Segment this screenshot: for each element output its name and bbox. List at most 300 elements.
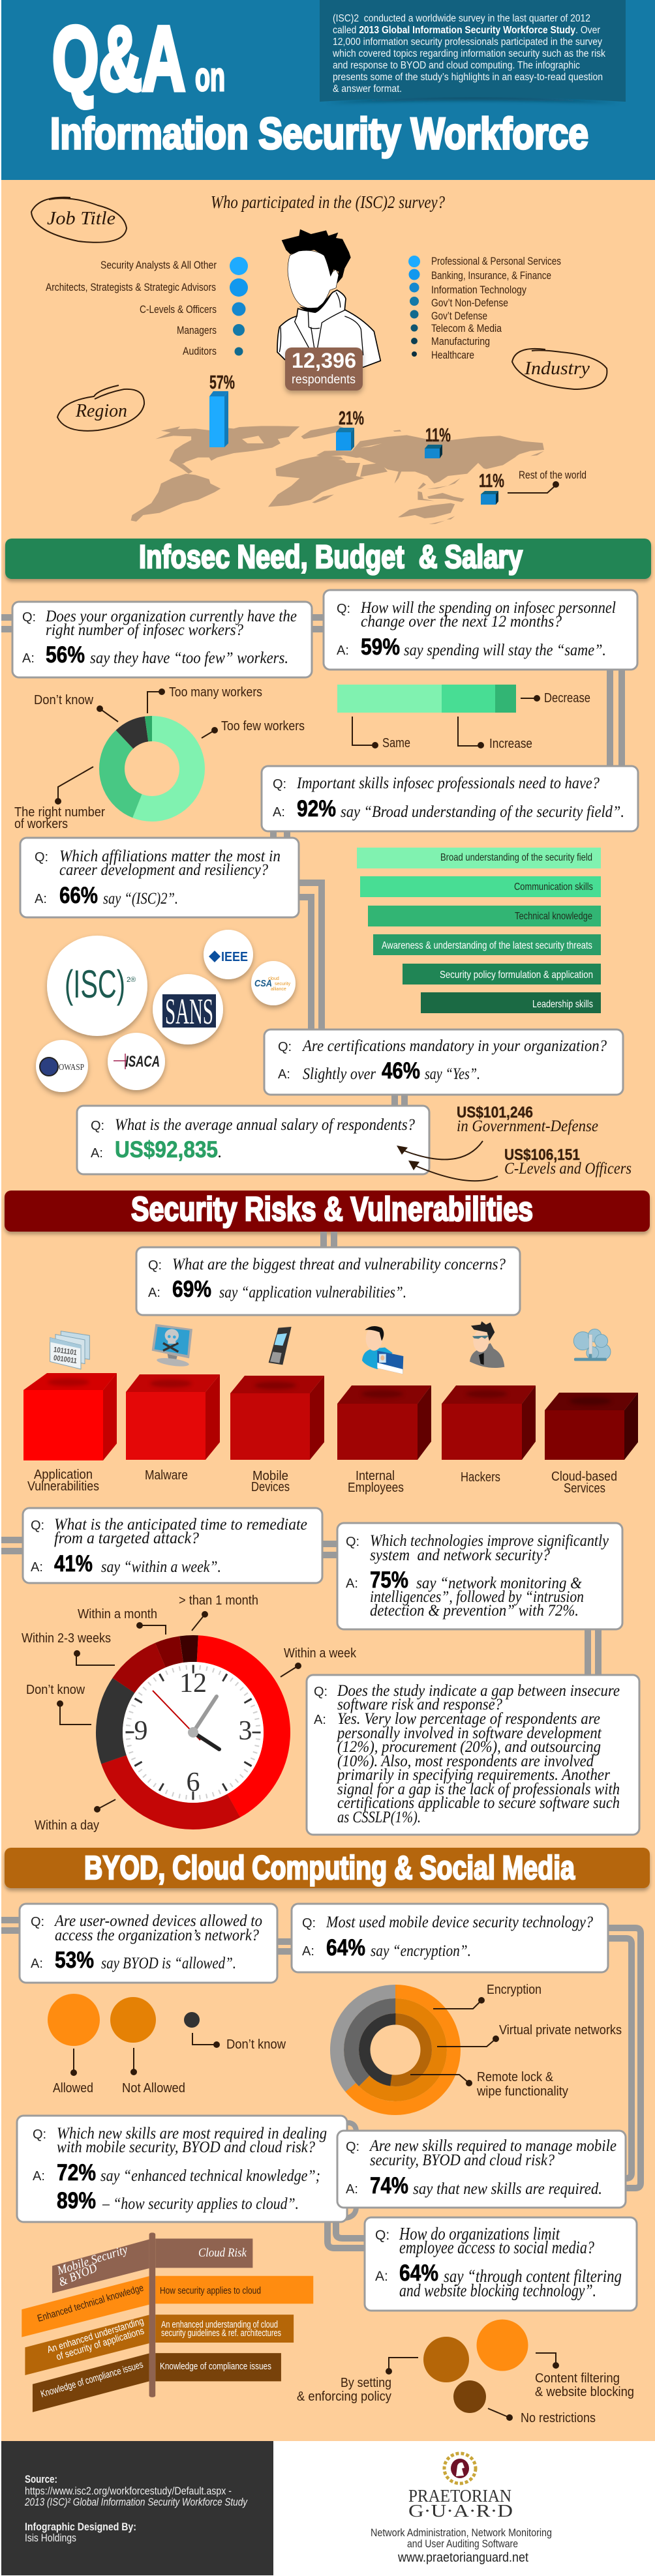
intro text panel: 12,000 information security professionals participated in the survey bbox=[333, 37, 602, 48]
clock face bbox=[123, 1662, 264, 1803]
section banner: infosec need bbox=[5, 539, 651, 579]
signpost bbox=[22, 2232, 313, 2412]
3d risk bars bbox=[23, 1373, 638, 1460]
bar: Asia 11%: 11% bbox=[425, 425, 451, 446]
ring segments bbox=[77, 1616, 309, 1848]
label: same: Same bbox=[382, 736, 410, 750]
q&a: are new skills required: 74% bbox=[370, 2173, 408, 2198]
donut chart: workers bbox=[14, 685, 305, 831]
callout: c-levels: US$106,151 bbox=[504, 1146, 580, 1164]
logo: OWASP: OWASP bbox=[59, 1063, 84, 1073]
footer: praetorian guard logo: and User Auditing Software bbox=[407, 2538, 518, 2550]
q&a: right number of workers: right number of infosec workers? bbox=[46, 620, 243, 639]
sign text: right: An enhanced understanding of cloud bbox=[161, 2319, 278, 2330]
intro text panel: & answer format. bbox=[333, 83, 402, 95]
header banner bbox=[1, 0, 655, 180]
q&a: user-owned devices: say BYOD is “allowed”. bbox=[101, 1953, 236, 1972]
skill bars bbox=[357, 848, 601, 1013]
callout: government defense bbox=[397, 1104, 598, 1159]
q&a: are new skills required: A: bbox=[346, 2182, 358, 2197]
label: within a week bbox=[281, 1646, 357, 1677]
sign text: left: An enhanced understanding bbox=[46, 2316, 145, 2356]
industry list: Gov’t Non-Defense bbox=[431, 297, 508, 309]
q&a: certifications: Are certifications mandatory in your organization? bbox=[301, 1036, 607, 1055]
q&a: important skills: A: bbox=[273, 805, 285, 820]
respondents badge: respondents bbox=[292, 373, 356, 387]
logo: SANS: SANS bbox=[165, 992, 213, 1032]
bubble chart: byod allowed bbox=[48, 1994, 286, 2095]
q&a: salary: What is the average annual salary of respondents? bbox=[115, 1115, 415, 1134]
sign text: left bbox=[36, 2243, 145, 2400]
q&a: software risk gap: A: bbox=[314, 1713, 326, 1727]
sign text: left: Enhanced technical knowledge bbox=[36, 2283, 145, 2324]
risk labels: Mobile bbox=[252, 1469, 288, 1483]
q&a: are new skills required: Are new skills required to manage mobile bbox=[369, 2136, 617, 2155]
clock face: 6 bbox=[187, 1768, 200, 1798]
q&a: right number of workers: 56% bbox=[46, 642, 85, 668]
connectors: risks 2 bbox=[1, 1540, 598, 1675]
bar: malware bbox=[126, 1374, 220, 1460]
q&a: software risk gap: primarily in specifying requirements. Another bbox=[336, 1765, 610, 1784]
q&a: technologies: detection & prevention” with 72%. bbox=[370, 1601, 579, 1620]
callout: c-levels bbox=[408, 1146, 632, 1181]
bar: hackers bbox=[442, 1385, 536, 1460]
label: don't know bbox=[192, 2033, 286, 2052]
skill bars: Leadership skills bbox=[532, 999, 593, 1010]
risk labels: Services bbox=[564, 1481, 605, 1496]
q&a: social media: Q: bbox=[375, 2228, 389, 2243]
label: increase bbox=[458, 717, 532, 751]
q&a: right number of workers: Q: bbox=[22, 610, 36, 625]
intro text panel bbox=[320, 0, 626, 103]
q&a: spending change: How will the spending on infosec personnel bbox=[360, 598, 616, 617]
respondents badge: 12,396 bbox=[292, 349, 356, 372]
industry tag bbox=[512, 349, 607, 389]
region tag bbox=[57, 385, 144, 431]
label: decrease: Decrease bbox=[544, 691, 590, 705]
q&a: important skills bbox=[262, 766, 638, 831]
label: decrease bbox=[521, 691, 590, 705]
connector: risks bbox=[324, 1232, 334, 1247]
label: by setting bbox=[297, 2358, 418, 2404]
bar: mobile devices bbox=[230, 1376, 324, 1460]
logo: SANS bbox=[153, 974, 223, 1044]
q&a: certifications: 46% bbox=[382, 1058, 420, 1084]
label: than 1 month: > than 1 month bbox=[179, 1593, 258, 1608]
q&a: time to remediate: 41% bbox=[54, 1551, 93, 1577]
logo: CSA bbox=[251, 961, 296, 1005]
q&a: software risk gap: as CSSLP(1%). bbox=[337, 1807, 421, 1826]
label: encryption: Encryption bbox=[487, 1983, 541, 1997]
q&a: important skills: say “Broad understanding of the security field”. bbox=[341, 802, 624, 821]
respondent figure bbox=[277, 229, 380, 367]
q&a: new skills needed: A: bbox=[33, 2169, 45, 2184]
bar: internal employees bbox=[337, 1385, 431, 1460]
footer: source panel bbox=[1, 2441, 273, 2575]
label: don't know bbox=[26, 1683, 91, 1725]
q&a: threat concerns: 69% bbox=[172, 1277, 211, 1302]
label: allowed bbox=[53, 2049, 93, 2095]
sign text: right bbox=[160, 2246, 281, 2372]
q&a: important skills: Important skills infosec professionals need to have? bbox=[296, 773, 600, 792]
q&a: spending change: A: bbox=[337, 644, 349, 658]
industry list bbox=[408, 255, 561, 361]
sign text: right: Cloud Risk bbox=[198, 2246, 247, 2260]
q&a: new skills needed: – “how security applies to cloud”. bbox=[102, 2194, 299, 2213]
q&a: new skills needed: 89% bbox=[57, 2188, 96, 2213]
footer: praetorian guard logo: Network Administration, Network Monitoring bbox=[371, 2526, 552, 2539]
risk labels: Malware bbox=[145, 1468, 188, 1483]
q&a: software risk gap: certifications applicable to secure software such bbox=[337, 1793, 620, 1812]
q&a: right number of workers: say they have “too few” workers. bbox=[90, 648, 288, 667]
bar: application vulnerabilities bbox=[23, 1373, 117, 1460]
q&a: spending change bbox=[324, 590, 637, 670]
q&a: technologies: A: bbox=[346, 1577, 358, 1591]
q&a: social media: 64% bbox=[399, 2260, 438, 2286]
bar: Europe 21%: 21% bbox=[339, 408, 364, 429]
label: increase: Increase bbox=[489, 737, 532, 751]
logo: ISC2 bbox=[47, 936, 147, 1036]
q&a: technologies: intelligences”, followed by “intrusion bbox=[370, 1587, 584, 1606]
q&a: social media: and website blocking technology”. bbox=[399, 2281, 596, 2300]
label: remote lock: Remote lock & bbox=[477, 2070, 554, 2084]
q&a: affiliations bbox=[20, 838, 299, 917]
job title list: C-Levels & Officers bbox=[140, 303, 217, 316]
icon: application windows: 1011101 bbox=[53, 1346, 78, 1357]
label: content filtering bbox=[535, 2353, 634, 2399]
risk labels: Vulnerabilities bbox=[27, 1479, 99, 1494]
q&a: social media: A: bbox=[375, 2269, 388, 2284]
salary callouts bbox=[397, 1104, 632, 1181]
risk labels: Devices bbox=[251, 1480, 290, 1494]
q&a: salary: . bbox=[218, 1142, 222, 1161]
threat icons bbox=[50, 1322, 611, 1374]
footer: praetorian guard logo: G·U·A·R·D bbox=[408, 2501, 513, 2521]
industry list: Banking, Insurance, & Finance bbox=[431, 269, 551, 282]
q&a: important skills: Q: bbox=[273, 777, 286, 792]
q&a: mobile security technology bbox=[292, 1904, 608, 1972]
q&a: social media: How do organizations limit bbox=[399, 2224, 560, 2243]
world map bbox=[131, 426, 544, 524]
icon: malware monitor bbox=[152, 1324, 192, 1368]
logo: OWASP bbox=[36, 1040, 88, 1092]
clock face: 3 bbox=[239, 1716, 252, 1746]
q&a: time to remediate: Q: bbox=[31, 1518, 44, 1533]
q&a: spending change: Q: bbox=[337, 602, 350, 616]
job title list: Security Analysts & All Other bbox=[100, 259, 217, 271]
q&a: salary: A: bbox=[91, 1146, 103, 1161]
q&a: software risk gap: signal for a gap is the lack of professionals with bbox=[337, 1779, 620, 1798]
title: on bbox=[195, 55, 225, 100]
q&a: certifications: Q: bbox=[278, 1040, 292, 1054]
job title list: Managers bbox=[177, 324, 217, 336]
q&a: affiliations: A: bbox=[35, 892, 47, 906]
skill bars: Security policy formulation & application bbox=[440, 970, 593, 981]
job title tag bbox=[31, 198, 127, 243]
q&a: new skills needed: Q: bbox=[33, 2127, 46, 2142]
sign text: right: security guidelines & ref. architectures bbox=[161, 2328, 281, 2339]
clock face: 9 bbox=[134, 1716, 147, 1746]
footer: praetorian guard logo: PRAETORIAN bbox=[408, 2486, 511, 2506]
q&a: software risk gap: Does the study indicate a gap between insecure bbox=[337, 1681, 620, 1700]
industry list: Manufacturing bbox=[431, 335, 490, 348]
q&a: software risk gap: (10%). Also, most respondents are involved bbox=[337, 1751, 594, 1770]
section banner: infosec need: Infosec Need, Budget & Salary bbox=[139, 539, 523, 575]
logo: CSA: alliance bbox=[271, 987, 286, 992]
q&a: new skills needed: Which new skills are most required in dealing bbox=[57, 2124, 327, 2142]
q&a: mobile security technology: Most used mobile device security technology? bbox=[326, 1912, 593, 1931]
q&a: are new skills required bbox=[337, 2131, 626, 2208]
footer: praetorian guard logo: www.praetorianguard.net bbox=[397, 2551, 528, 2565]
q&a: social media bbox=[365, 2217, 637, 2311]
footer: source panel: Isis Holdings bbox=[25, 2532, 76, 2544]
label: don't know: Don’t know bbox=[226, 2037, 286, 2052]
label: don't know: Don’t know bbox=[26, 1683, 85, 1697]
q&a: right number of workers bbox=[12, 602, 312, 677]
footer: praetorian guard logo bbox=[371, 2453, 552, 2565]
q&a: software risk gap bbox=[307, 1675, 639, 1835]
q&a: salary: Q: bbox=[91, 1119, 104, 1133]
label: right number bbox=[14, 767, 105, 831]
q&a: mobile security technology: A: bbox=[302, 1944, 314, 1959]
icon: internal employee bbox=[362, 1326, 403, 1374]
q&a: threat concerns: Q: bbox=[148, 1258, 162, 1273]
logo: ISACA: ISACA bbox=[125, 1053, 160, 1071]
label: rest of the world: Rest of the world bbox=[519, 469, 586, 481]
q&a: threat concerns bbox=[136, 1247, 520, 1315]
label: no restrictions: No restrictions bbox=[521, 2411, 596, 2425]
q&a: affiliations: Which affiliations matter the most in bbox=[59, 846, 281, 865]
label: allowed: Allowed bbox=[53, 2081, 93, 2095]
bar: rest of the world 11% bbox=[479, 471, 504, 505]
sign text: right: Knowledge of compliance issues bbox=[160, 2361, 271, 2372]
q&a: technologies: system and network security? bbox=[370, 1545, 550, 1564]
q&a: new skills needed: with mobile security, BYOD and cloud risk? bbox=[57, 2137, 315, 2156]
label: rest of the world bbox=[508, 469, 586, 493]
label: virtual private networks: Virtual private networks bbox=[499, 2023, 622, 2037]
label: not allowed: Not Allowed bbox=[122, 2081, 185, 2095]
q&a: right number of workers: Does your organization currently have the bbox=[45, 606, 297, 625]
risk labels: Internal bbox=[356, 1469, 395, 1483]
label: within a month: Within a month bbox=[78, 1607, 157, 1621]
q&a: threat concerns: say “application vulnerabilities”. bbox=[219, 1282, 406, 1301]
industry list: Information Technology bbox=[431, 284, 526, 296]
bar: North America 57% bbox=[209, 372, 235, 447]
job title tag: Job Title bbox=[47, 208, 115, 229]
q&a: user-owned devices bbox=[20, 1904, 277, 1983]
q&a: technologies bbox=[337, 1523, 622, 1629]
q&a: affiliations: say “(ISC)2”. bbox=[103, 889, 178, 908]
label: right number: of workers bbox=[14, 817, 68, 831]
q&a: important skills: 92% bbox=[297, 796, 336, 822]
q&a: new skills needed bbox=[17, 2116, 347, 2222]
logo: ISC2: (ISC) bbox=[65, 962, 125, 1006]
job title list: Architects, Strategists & Strategic Advisors bbox=[46, 281, 216, 293]
label: right number: The right number bbox=[14, 805, 105, 820]
industry list: Telecom & Media bbox=[431, 322, 502, 334]
q&a: technologies: Which technologies improve significantly bbox=[370, 1531, 609, 1550]
label: encryption bbox=[433, 1983, 541, 2009]
q&a: user-owned devices: Q: bbox=[31, 1915, 44, 1929]
q&a: spending change: say spending will stay the “same”. bbox=[404, 640, 606, 659]
icon: application windows bbox=[50, 1331, 89, 1369]
q&a: user-owned devices: Are user-owned devices allowed to bbox=[53, 1911, 262, 1930]
label: within a day: Within a day bbox=[35, 1818, 99, 1833]
q&a: user-owned devices: access the organization’s network? bbox=[55, 1925, 259, 1944]
sign text: left: Knowledge of compliance issues bbox=[39, 2359, 144, 2400]
logo: ISC2: 2® bbox=[127, 976, 136, 984]
label: by setting: By setting bbox=[341, 2376, 391, 2390]
q&a: mobile security technology: Q: bbox=[302, 1916, 316, 1931]
q&a: software risk gap: Yes. Very low percentage of respondents are bbox=[337, 1709, 600, 1728]
footer: source panel: Source: bbox=[25, 2473, 57, 2485]
risk labels: Hackers bbox=[461, 1470, 500, 1485]
q&a: threat concerns: A: bbox=[148, 1286, 160, 1300]
intro text panel: presents some of the study’s highlights in an easy-to-read question bbox=[333, 72, 603, 83]
sign text: left: of security of applications bbox=[55, 2326, 145, 2363]
label: no restrictions bbox=[488, 2408, 596, 2425]
q&a: threat concerns: What are the biggest threat and vulnerability concerns? bbox=[172, 1254, 506, 1273]
logo: CSA: security bbox=[275, 982, 291, 986]
label: virtual private networks bbox=[437, 2023, 622, 2047]
callout: c-levels: C-Levels and Officers bbox=[504, 1159, 632, 1177]
skill bars: Technical knowledge bbox=[515, 911, 592, 922]
connectors: section 2 bbox=[1, 617, 622, 1106]
q&a: software risk gap: software risk and response? bbox=[337, 1695, 502, 1713]
industry list: Professional & Personal Services bbox=[431, 255, 561, 267]
logo: CSA: CSA bbox=[254, 978, 272, 989]
label: don't know: Don’t know bbox=[34, 693, 94, 707]
icon: hacker bbox=[470, 1322, 504, 1368]
intro text panel: which covered topics regarding information security such as the risk bbox=[332, 48, 605, 59]
risk labels: Application bbox=[34, 1468, 93, 1482]
job title list: Auditors bbox=[183, 345, 217, 357]
intro text panel: called 2013 Global Information Security Workforce Study. Over bbox=[333, 25, 600, 36]
q&a: spending change: 59% bbox=[361, 634, 400, 660]
sign boards bbox=[22, 2232, 313, 2412]
bar: Asia 11% bbox=[425, 425, 451, 458]
callout: government defense: US$101,246 bbox=[457, 1104, 533, 1121]
q&a: certifications: say “Yes”. bbox=[425, 1064, 480, 1083]
region bars bbox=[209, 372, 586, 505]
q&a: are new skills required: say that new skills are required. bbox=[413, 2179, 602, 2198]
bar: cloud-based services bbox=[545, 1393, 638, 1460]
q&a: certifications bbox=[264, 1029, 623, 1095]
q&a: affiliations: 66% bbox=[59, 883, 98, 908]
region tag: Region bbox=[75, 400, 127, 421]
icon: application windows: 0010011 bbox=[53, 1354, 78, 1365]
q&a: software risk gap: (12%), procurement (20%), and outsourcing bbox=[337, 1737, 601, 1756]
ring chart: mobile security bbox=[313, 1968, 622, 2132]
label: by setting: & enforcing policy bbox=[297, 2390, 391, 2404]
intro text panel: and response to BYOD and cloud computing. The infographic bbox=[333, 60, 580, 71]
label: within a month bbox=[78, 1607, 166, 1635]
risk labels bbox=[27, 1468, 617, 1496]
footer: source panel: 2013 (ISC)² Global Information Security Workforce Study bbox=[24, 2496, 248, 2508]
label: too few workers: Too few workers bbox=[221, 719, 305, 733]
icon: laurel crest bbox=[444, 2453, 476, 2483]
q&a: new skills needed: 72% bbox=[57, 2160, 96, 2185]
q&a: are new skills required: security, BYOD and cloud risk? bbox=[370, 2150, 555, 2169]
q&a: mobile security technology: 64% bbox=[326, 1935, 365, 1961]
industry list: Healthcare bbox=[431, 349, 474, 361]
q&a: mobile security technology: say “encryption”. bbox=[371, 1941, 471, 1960]
q&a: certifications: A: bbox=[278, 1067, 290, 1082]
label: too many workers bbox=[147, 685, 262, 713]
clock face: 12 bbox=[179, 1668, 207, 1698]
q&a: time to remediate: What is the anticipated time to remediate bbox=[54, 1515, 307, 1533]
label: too many workers: Too many workers bbox=[169, 685, 262, 700]
label: within 2-3 weeks bbox=[22, 1631, 115, 1665]
skill bars: Broad understanding of the security field bbox=[440, 852, 592, 863]
label: not allowed bbox=[122, 2048, 185, 2095]
q&a: user-owned devices: A: bbox=[31, 1957, 43, 1971]
connectors: byod bbox=[1, 1920, 641, 2248]
callout: government defense: in Government-Defense bbox=[457, 1116, 598, 1135]
q&a: are new skills required: Q: bbox=[346, 2140, 359, 2154]
label: content filtering: Content filtering bbox=[535, 2371, 620, 2386]
q&a: spending change: change over the next 12 months? bbox=[361, 612, 562, 630]
industry tag: Industry bbox=[524, 358, 590, 379]
q&a: software risk gap: personally involved in software development bbox=[336, 1723, 602, 1742]
q&a: time to remediate: A: bbox=[31, 1560, 43, 1575]
q&a: time to remediate bbox=[23, 1508, 322, 1583]
footer: source panel: https://www.isc2.org/workforcestudy/Default.aspx - bbox=[25, 2485, 232, 2497]
footer: source panel: Infographic Designed By: bbox=[25, 2521, 136, 2533]
q&a: technologies: Q: bbox=[346, 1535, 359, 1549]
sign text: left: Mobile Security bbox=[55, 2243, 130, 2278]
industry list: Gov’t Defense bbox=[431, 310, 487, 322]
survey question heading: Who participated in the (ISC)2 survey? bbox=[211, 192, 445, 212]
q&a: technologies: 75% bbox=[370, 1567, 408, 1593]
clock chart bbox=[22, 1593, 357, 1848]
bar: Europe 21% bbox=[336, 408, 364, 451]
respondents badge bbox=[285, 348, 363, 391]
risk labels: Employees bbox=[348, 1481, 404, 1495]
skill bars: Awareness & understanding of the latest security threats bbox=[382, 940, 592, 951]
q&a: time to remediate: say “within a week”. bbox=[101, 1557, 221, 1576]
title: Q&A bbox=[52, 7, 185, 110]
q&a: social media: say “through content filtering bbox=[444, 2266, 622, 2286]
logo: IEEE: IEEE bbox=[221, 950, 248, 964]
bar: North America 57%: 57% bbox=[209, 372, 235, 393]
label: don't know bbox=[34, 693, 118, 722]
label: within a week: Within a week bbox=[284, 1646, 357, 1661]
skill bars: Communication skills bbox=[514, 881, 593, 893]
sign text: right: How security applies to cloud bbox=[160, 2285, 261, 2296]
q&a: salary: US$92,835 bbox=[115, 1137, 218, 1162]
job title list bbox=[46, 257, 248, 357]
q&a: social media: employee access to social media? bbox=[399, 2238, 594, 2257]
label: remote lock bbox=[410, 2070, 568, 2099]
q&a: certifications: Slightly over bbox=[303, 1064, 376, 1083]
label: than 1 month bbox=[179, 1593, 258, 1631]
logo: ISACA bbox=[108, 1033, 165, 1090]
label: within 2-3 weeks: Within 2-3 weeks bbox=[22, 1631, 111, 1646]
q&a: user-owned devices: 53% bbox=[55, 1947, 94, 1973]
intro text panel: (ISC)2 conducted a worldwide survey in the last quarter of 2012 bbox=[333, 13, 590, 24]
q&a: software risk gap: Q: bbox=[314, 1685, 328, 1699]
q&a: affiliations: career development and resiliency? bbox=[59, 860, 268, 879]
logo: IEEE bbox=[204, 930, 253, 979]
label: too few workers bbox=[202, 719, 305, 738]
label: same bbox=[352, 717, 410, 750]
q&a: affiliations: Q: bbox=[35, 850, 48, 865]
section banner: security risks: Security Risks & Vulnerabilities bbox=[131, 1191, 533, 1228]
q&a: salary bbox=[77, 1106, 429, 1174]
label: content filtering: & website blocking bbox=[535, 2385, 634, 2399]
icon: cloud services bbox=[573, 1329, 611, 1361]
